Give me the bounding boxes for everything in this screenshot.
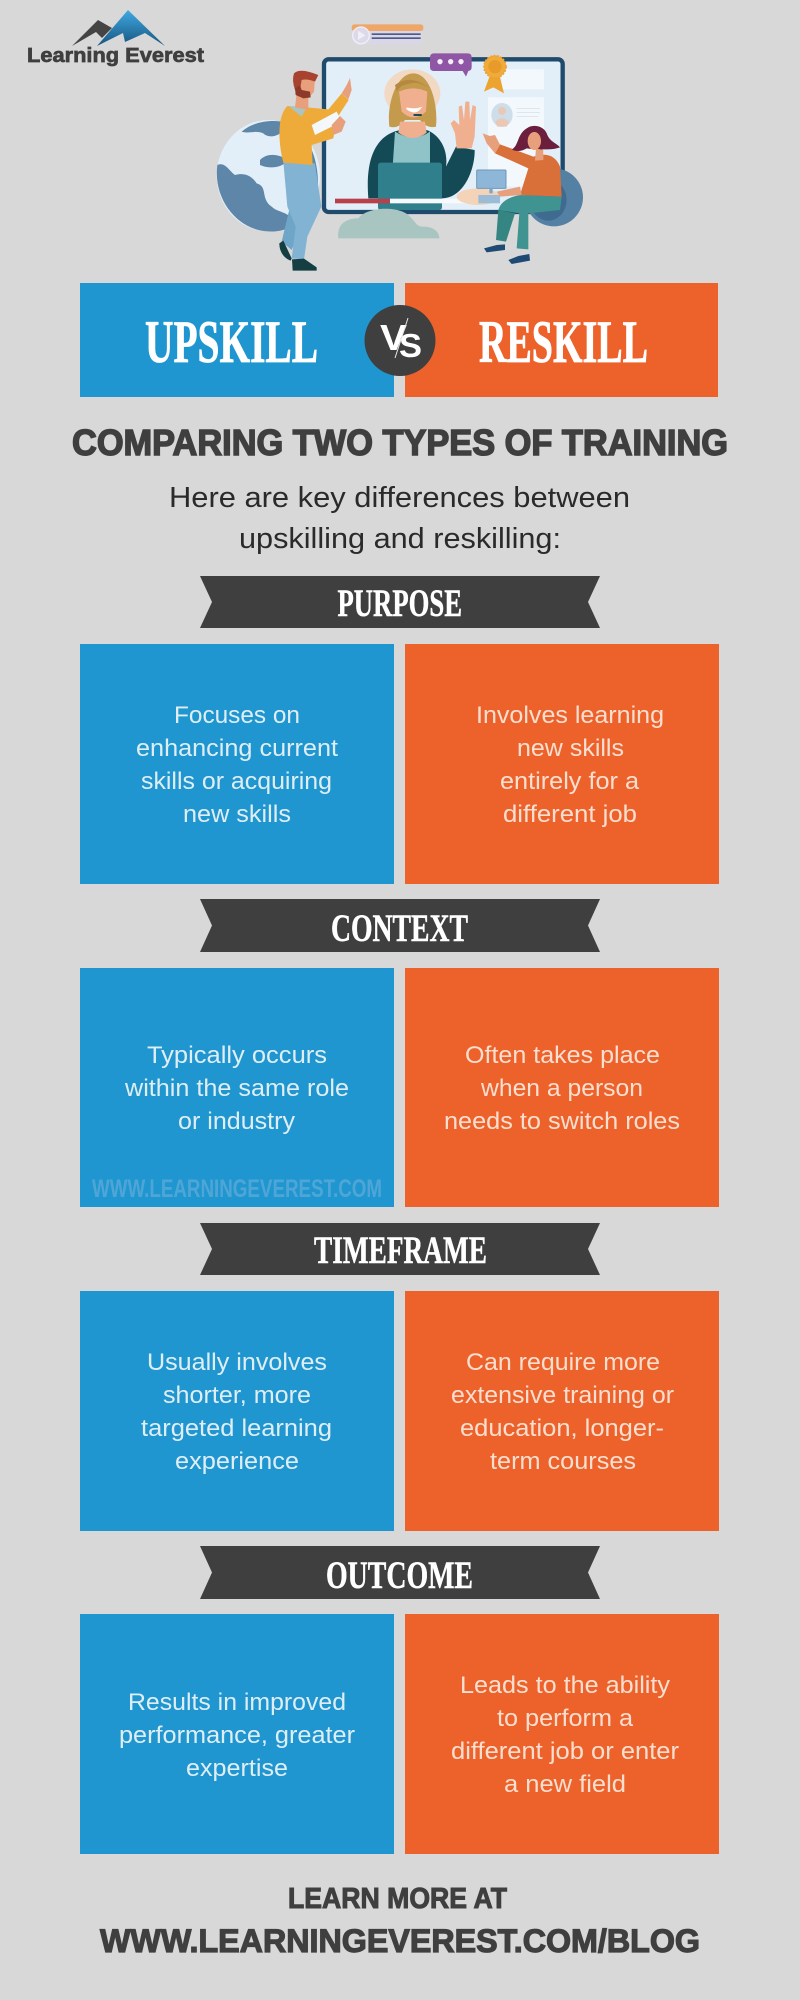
panel: upskill purpose: skills or acquiring: [141, 768, 332, 795]
footer call to action: [100, 1883, 700, 1959]
panel: UPSKILL header: UPSKILL: [145, 309, 318, 375]
panel: reskill timeframe: education, longer-: [460, 1415, 664, 1442]
intro text: upskilling and reskilling:: [239, 523, 561, 555]
panel: reskill context: [405, 968, 719, 1207]
globe: [217, 120, 320, 232]
logo: Learning Everest: [27, 10, 204, 67]
section ribbon: OUTCOME: [200, 1546, 600, 1599]
panel: upskill outcome: Results in improved: [128, 1689, 346, 1716]
panel: reskill timeframe: extensive training or: [451, 1382, 674, 1409]
panel: upskill purpose: new skills: [183, 801, 291, 828]
illustration: online training scene: [217, 24, 583, 271]
panel: upskill timeframe: shorter, more: [163, 1382, 311, 1409]
panel: RESKILL header: RESKILL: [479, 309, 648, 375]
bush: [338, 209, 439, 238]
panel: upskill context: within the same role: [124, 1075, 349, 1102]
section ribbon: PURPOSE: [200, 576, 600, 628]
panel: reskill purpose: different job: [503, 801, 637, 828]
panel: upskill timeframe: Usually involves: [147, 1349, 327, 1376]
panel: reskill purpose: [405, 644, 719, 884]
panel: reskill context: needs to switch roles: [444, 1108, 680, 1135]
panel: reskill purpose: entirely for a: [500, 768, 640, 795]
panel: reskill outcome: [405, 1614, 719, 1854]
section ribbon: CONTEXT: [200, 899, 600, 952]
panel: reskill outcome: a new field: [504, 1771, 626, 1798]
panel: upskill outcome: performance, greater: [119, 1722, 355, 1749]
VS badge: [364, 305, 436, 376]
screen: [324, 59, 563, 212]
intro text: [169, 482, 630, 555]
title: COMPARING TWO TYPES OF TRAINING: [72, 422, 728, 463]
panel: reskill outcome: Leads to the ability: [460, 1672, 670, 1699]
section ribbon: OUTCOME: OUTCOME: [326, 1554, 473, 1597]
footer call to action: LEARN MORE AT: [288, 1883, 507, 1915]
panel: UPSKILL header: [80, 283, 394, 397]
panel: upskill outcome: expertise: [186, 1755, 288, 1782]
panel: reskill timeframe: term courses: [490, 1448, 636, 1475]
panel: reskill purpose: Involves learning: [476, 702, 664, 729]
panel: upskill outcome: [80, 1614, 394, 1854]
panel: upskill purpose: Focuses on: [174, 702, 300, 729]
panel: reskill context: when a person: [480, 1075, 643, 1102]
section ribbon: TIMEFRAME: [200, 1223, 600, 1275]
icon: speech bubble: [430, 53, 472, 77]
panel: upskill purpose: [80, 644, 394, 884]
panel: reskill outcome: different job or enter: [451, 1738, 679, 1765]
VS badge: V: [380, 317, 407, 358]
section ribbon: PURPOSE: PURPOSE: [338, 582, 462, 625]
footer call to action: WWW.LEARNINGEVEREST.COM/BLOG: [100, 1923, 700, 1959]
icon: award ribbon: [484, 56, 506, 93]
panel: RESKILL header: [405, 283, 718, 397]
panel: upskill context: or industry: [178, 1108, 295, 1135]
panel: reskill timeframe: Can require more: [466, 1349, 660, 1376]
intro text: Here are key differences between: [169, 482, 630, 514]
progress bar: [335, 199, 467, 203]
panel: upskill context: [80, 968, 394, 1207]
icon: video player card: [352, 24, 423, 44]
man with tablet: [279, 71, 352, 271]
section ribbon: TIMEFRAME: TIMEFRAME: [314, 1229, 487, 1272]
panel: reskill context: Often takes place: [465, 1042, 660, 1069]
watermark: WWW.LEARNINGEVEREST.COM: [92, 1175, 382, 1203]
panel: reskill purpose: new skills: [517, 735, 624, 762]
logo: Learning Everest: Learning Everest: [27, 44, 204, 67]
panel: upskill purpose: enhancing current: [136, 735, 338, 762]
panel: upskill timeframe: experience: [175, 1448, 299, 1475]
seated woman at laptop: [457, 126, 583, 264]
VS badge: S: [399, 327, 422, 364]
panel: upskill timeframe: [80, 1291, 394, 1531]
panel: upskill timeframe: targeted learning: [141, 1415, 332, 1442]
panel: upskill context: Typically occurs: [147, 1042, 327, 1069]
presenter: [368, 69, 476, 210]
panel: reskill outcome: to perform a: [497, 1705, 634, 1732]
section ribbon: CONTEXT: CONTEXT: [331, 907, 468, 950]
panel: reskill timeframe: [405, 1291, 719, 1531]
